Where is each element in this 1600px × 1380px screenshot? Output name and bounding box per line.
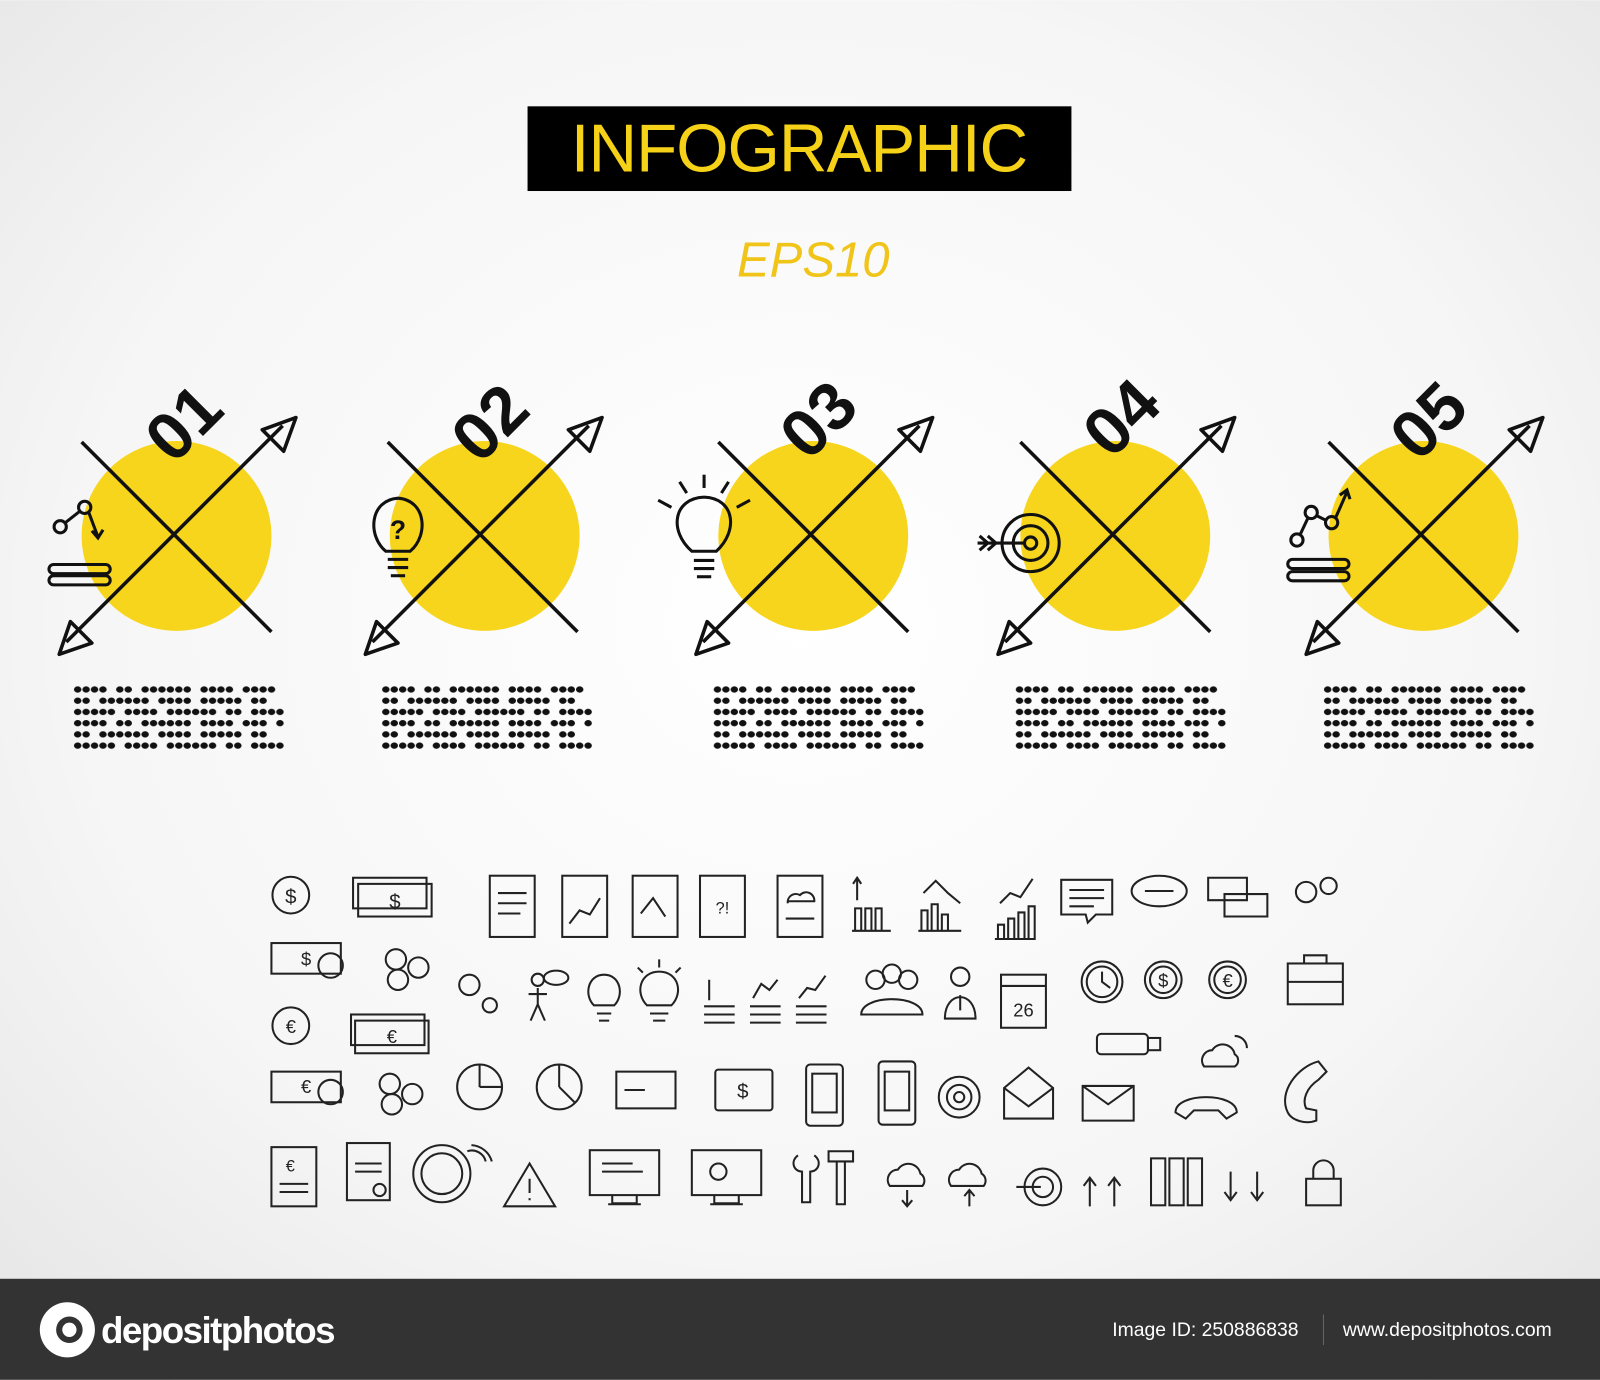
icon: light bulb <box>658 475 750 577</box>
logo: depositphotos <box>101 1310 334 1351</box>
text block <box>73 684 284 751</box>
panel 1: 01 <box>131 370 237 476</box>
row 1 icons: $ <box>285 886 297 908</box>
row 3 icons: € <box>286 1016 296 1037</box>
icon: chart flow <box>49 501 110 585</box>
row 4 icons: € <box>301 1076 311 1097</box>
subtitle EPS10: EPS10 <box>737 234 889 288</box>
text block <box>1323 684 1534 751</box>
text block <box>382 684 592 751</box>
panel 3: 03 <box>766 367 872 473</box>
row 3 icons <box>272 1007 1247 1067</box>
panel 2 <box>365 370 602 751</box>
icon: question bulb: ? <box>390 515 406 545</box>
icon set <box>271 876 1343 1206</box>
row 1 icons <box>272 876 1337 939</box>
icon: growth chart <box>1288 490 1350 581</box>
icon: target <box>978 514 1059 572</box>
row 4 icons <box>271 1061 1327 1126</box>
icon: question bulb <box>374 498 422 576</box>
row 5 icons: € <box>286 1158 295 1176</box>
image id: Image ID: 250886838 <box>1112 1319 1299 1341</box>
footer bar <box>0 1279 1600 1380</box>
row 2 icons: € <box>1222 970 1233 991</box>
title: INFOGRAPHIC <box>571 112 1027 187</box>
panel 3 <box>658 367 933 751</box>
panel 4 <box>978 365 1235 751</box>
row 2 icons: $ <box>301 949 311 970</box>
row 2 icons: 26 <box>1013 1000 1034 1021</box>
row 4 icons: $ <box>737 1081 749 1103</box>
panel 5 <box>1288 368 1543 751</box>
logo <box>40 1302 334 1357</box>
row 1 icons: ?! <box>716 899 729 917</box>
website: www.depositphotos.com <box>1342 1319 1552 1341</box>
text block <box>1015 684 1226 751</box>
row 2 icons <box>271 943 1343 1028</box>
row 5 icons <box>271 1143 1341 1206</box>
panel 4: 04 <box>1069 365 1175 471</box>
row 1 icons: $ <box>389 891 401 913</box>
panel 2: 02 <box>437 370 543 476</box>
row 2 icons: $ <box>1158 970 1168 991</box>
text block <box>713 684 924 751</box>
panel 1 <box>49 370 296 751</box>
row 3 icons: € <box>387 1026 397 1047</box>
panel 5: 05 <box>1376 368 1482 474</box>
